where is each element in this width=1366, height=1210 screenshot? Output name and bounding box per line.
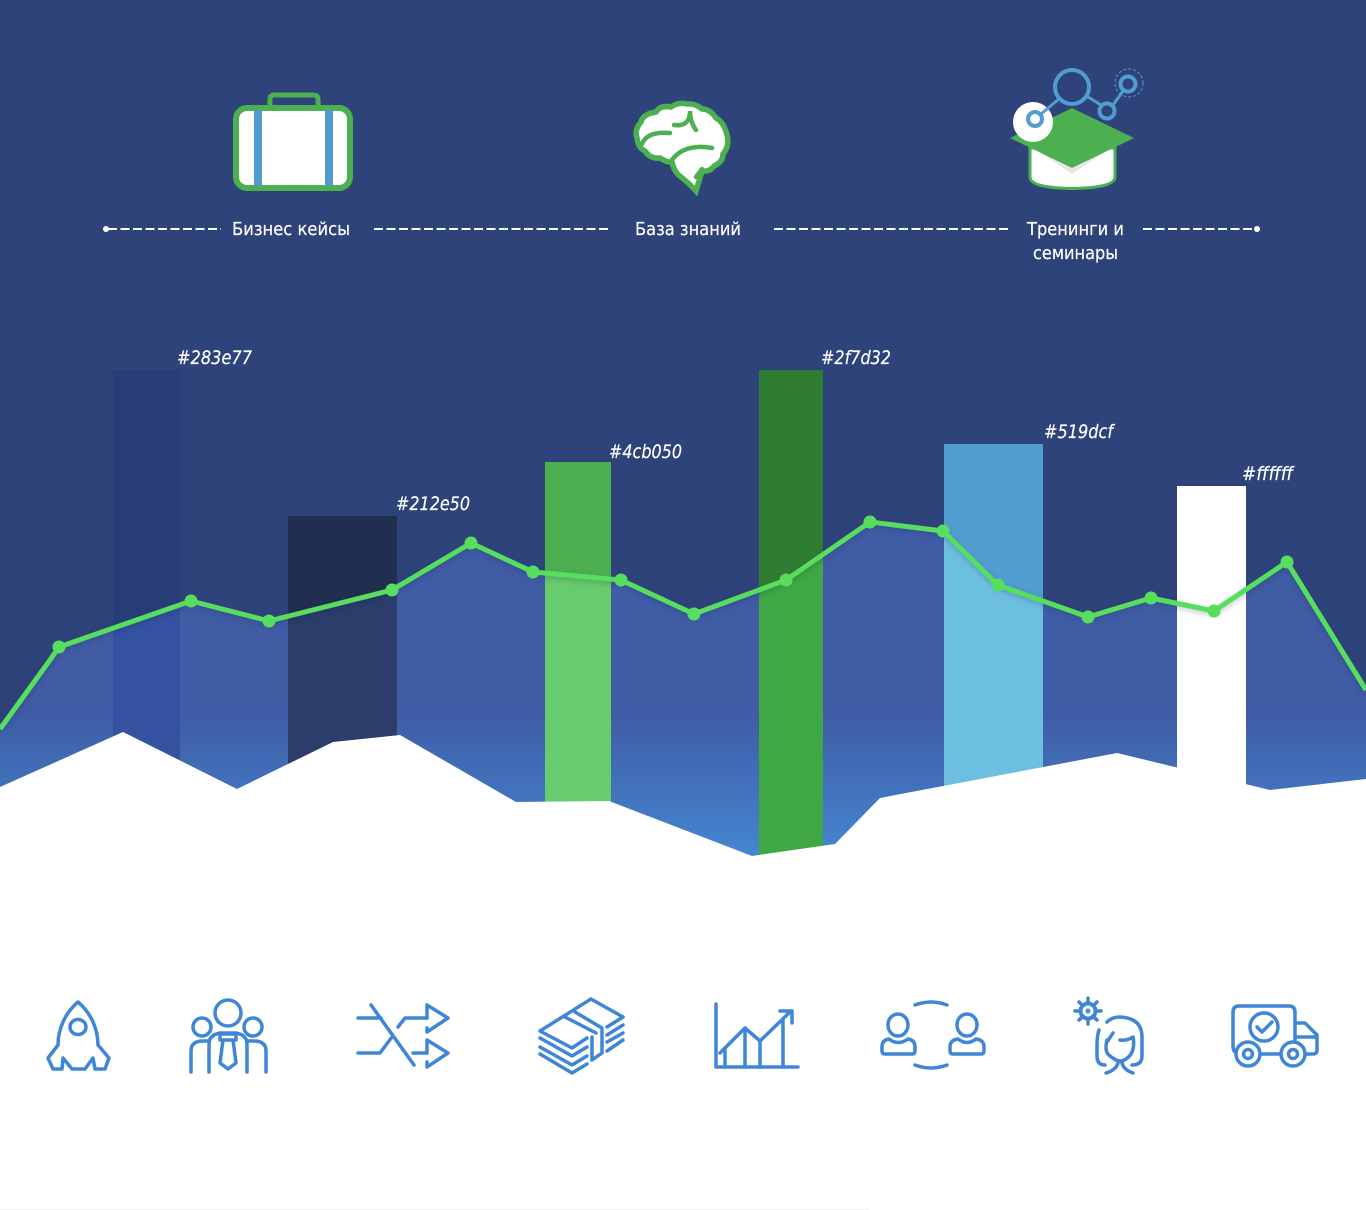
bar #4cb050: [545, 462, 611, 812]
bar #212e50: [288, 516, 397, 816]
area under line: [0, 522, 1366, 900]
icon: suitcase: [236, 95, 350, 188]
bar label #519dcf: #519dcf: [1044, 421, 1116, 443]
icon: two people exchange: [882, 1002, 984, 1068]
icon: growth chart: [716, 1004, 798, 1067]
label: trainings and seminars: Тренинги и: [1026, 219, 1124, 240]
timeline dashes: [103, 226, 1260, 232]
icon: shuffle arrows: [358, 1005, 448, 1067]
white mountain foreground: [0, 732, 1366, 1210]
bar #2f7d32: [759, 370, 823, 860]
bars inside area: [113, 537, 1246, 855]
icon: rocket: [48, 1002, 109, 1069]
icon: stack of money: [540, 999, 623, 1073]
label: trainings and seminars: семинары: [1033, 243, 1118, 264]
bar #ffffff: [1177, 486, 1246, 806]
green line: [0, 522, 1366, 729]
bar #283e77: [113, 370, 180, 800]
background panel: [0, 0, 1366, 900]
icon: woman with gear: [1075, 998, 1142, 1073]
icon: graduation cap with nodes: [1010, 69, 1143, 188]
label: knowledge base: База знаний: [635, 219, 741, 240]
bar label #212e50: #212e50: [396, 493, 470, 515]
bar label #4cb050: #4cb050: [609, 441, 682, 463]
bar label #ffffff: #ffffff: [1242, 463, 1295, 485]
icon: delivery truck: [1233, 1006, 1317, 1066]
icon: brain: [636, 103, 728, 191]
bar label #283e77: #283e77: [177, 347, 252, 369]
label: business cases: Бизнес кейсы: [232, 219, 350, 240]
icon: team: [191, 1000, 266, 1072]
chart: bars, area and line: [0, 370, 1366, 900]
bar #519dcf: [944, 444, 1043, 794]
bar label #2f7d32: #2f7d32: [821, 347, 891, 369]
line markers: [52, 516, 1294, 654]
